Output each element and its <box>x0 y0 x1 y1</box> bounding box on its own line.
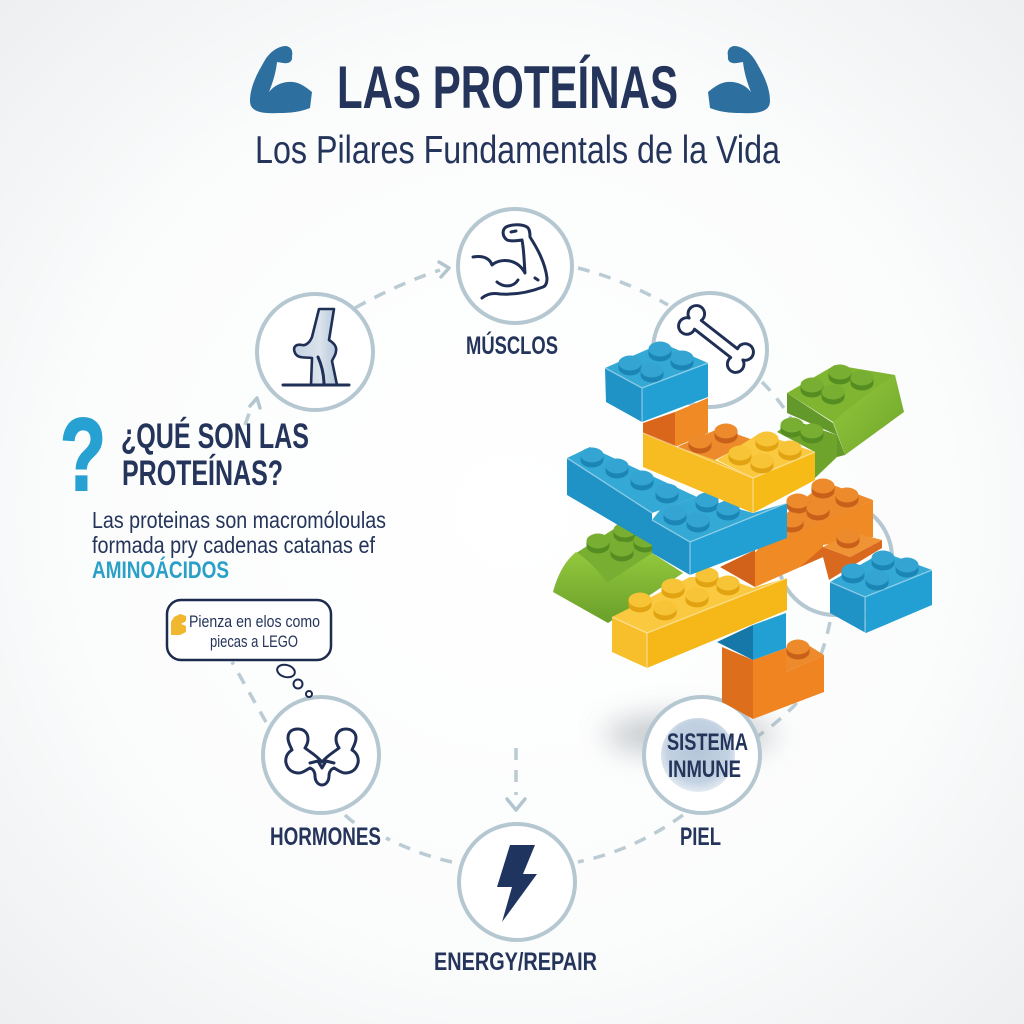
label: energy/repair: ENERGY/REPAIR <box>434 948 597 976</box>
brick: orange right <box>720 478 873 587</box>
definition text <box>92 507 386 584</box>
node: immune system circle <box>644 697 760 813</box>
icon: biceps outline <box>473 225 547 298</box>
node: joint circle <box>257 294 373 410</box>
heading: qué son las proteínas: ¿QUÉ SON LAS <box>121 416 309 456</box>
definition text: formada pry cadenas catanas ef <box>92 532 376 558</box>
icon: bone <box>675 302 757 376</box>
callout: thought bubble <box>167 600 331 697</box>
node: hidden circle behind bricks <box>778 501 892 615</box>
brick: small green <box>777 418 837 478</box>
brick ground shadow <box>605 715 775 755</box>
node: energy circle <box>459 824 575 940</box>
label: piel: PIEL <box>680 823 721 851</box>
brick: orange under blue <box>643 398 708 447</box>
brick: blue right <box>830 550 932 633</box>
heading: qué son las proteínas <box>121 416 309 493</box>
brick: small orange step <box>800 528 882 580</box>
label: sistema inmune: INMUNE <box>668 756 741 783</box>
brick: yellow upper <box>643 424 815 513</box>
title: LAS PROTEÍNAS <box>337 54 678 121</box>
brick: blue top <box>605 342 708 422</box>
icon: joint <box>283 309 349 385</box>
bubble text <box>189 612 320 651</box>
node: muscles circle <box>458 209 572 323</box>
definition text: Las proteinas son macromóloulas <box>92 507 386 533</box>
definition text: AMINOÁCIDOS <box>92 556 229 584</box>
subtitle: Los Pilares Fundamentals de la Vida <box>255 129 780 172</box>
heading: qué son las proteínas: PROTEÍNAS? <box>122 453 283 493</box>
label: hormones: HORMONES <box>270 823 381 851</box>
bubble text: piecas a LEGO <box>210 632 298 651</box>
icon: flexed arm right <box>708 46 770 113</box>
question mark icon: ? <box>60 397 106 512</box>
brick: yellow lower <box>612 568 787 668</box>
label: sistema inmune: SISTEMA <box>667 729 748 756</box>
label: sistema inmune <box>667 729 748 783</box>
icon: flexed arm left <box>250 46 312 113</box>
brick: big green right <box>787 364 904 457</box>
brick: blue long and cross <box>567 447 787 575</box>
bubble text: Pienza en elos como <box>189 612 320 631</box>
icon: hormones glands <box>286 729 358 785</box>
node: bone circle <box>653 293 767 407</box>
brick: blue connector <box>717 613 786 660</box>
label: músculos: MÚSCLOS <box>466 330 558 360</box>
brick: orange bottom <box>722 640 824 719</box>
node: hormones circle <box>263 697 379 813</box>
icon: small lego <box>171 614 186 635</box>
icon: lightning bolt <box>497 845 537 922</box>
illustration: lego bricks <box>553 342 932 719</box>
brick: green left <box>553 522 683 623</box>
cycle connectors: dashed ring with arrows <box>232 262 830 862</box>
